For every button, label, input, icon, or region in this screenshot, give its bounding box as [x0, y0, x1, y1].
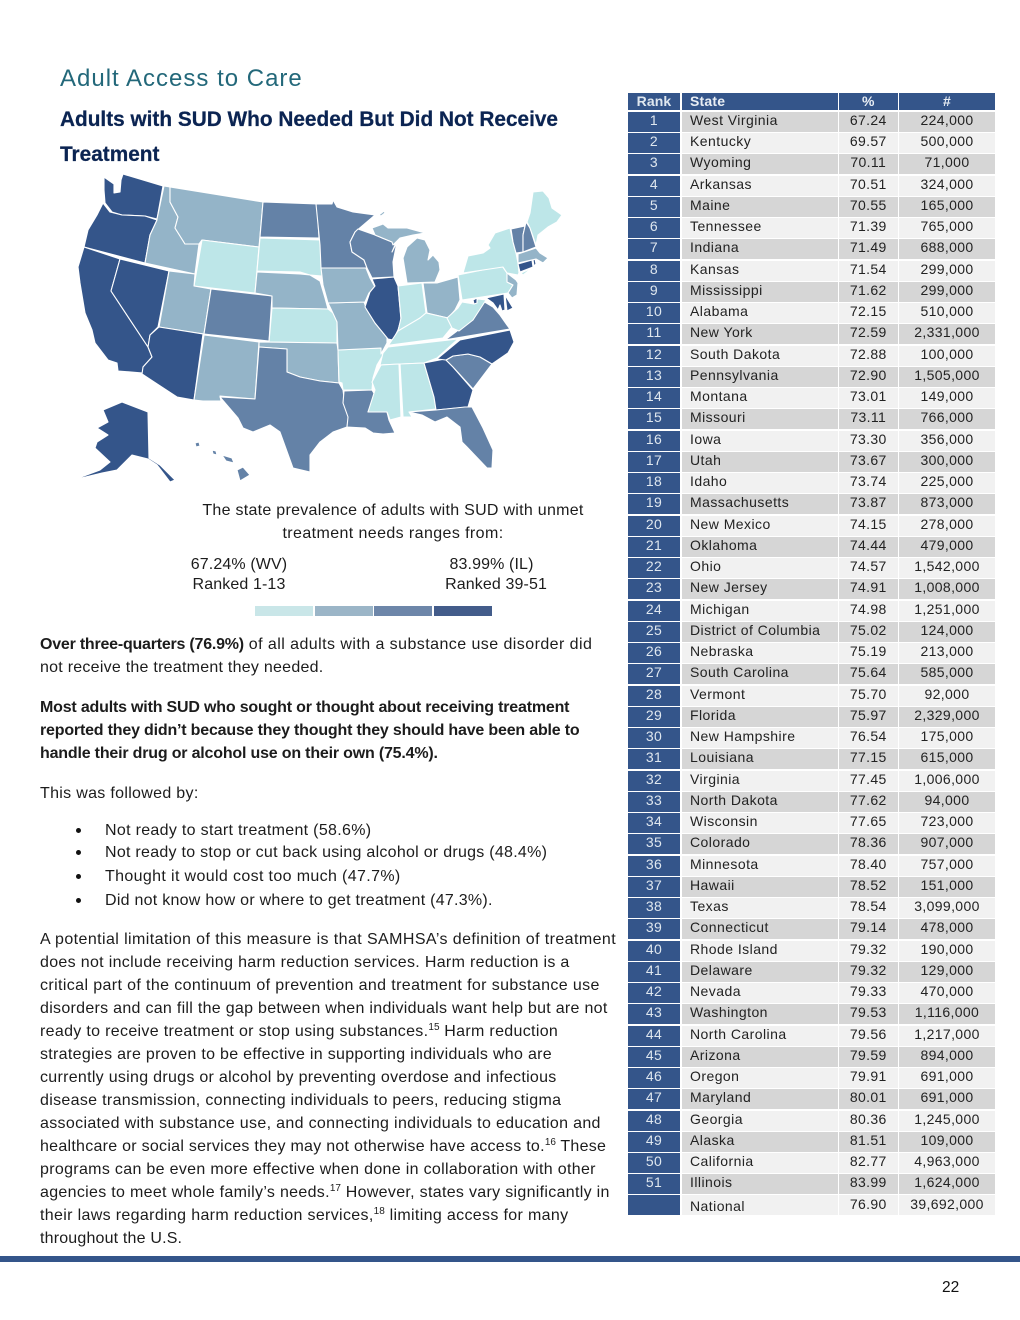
table: state rankings: Montana — [690, 388, 748, 404]
table: state rankings: 38 — [646, 898, 662, 914]
range caption — [202, 502, 584, 542]
table: state rankings: 4,963,000 — [914, 1153, 980, 1169]
table: state rankings: 2 — [650, 133, 658, 149]
range caption: The state prevalence of adults with SUD with unmet — [202, 502, 584, 519]
table: state rankings: 37 — [646, 877, 662, 893]
table: state rankings: 13 — [646, 367, 662, 383]
table: state rankings: 77.62 — [850, 792, 887, 808]
table: state rankings: 16 — [646, 431, 662, 447]
table: state rankings: 77.65 — [850, 813, 887, 829]
table: state rankings: 585,000 — [920, 664, 974, 680]
table: state rankings: 109,000 — [920, 1132, 974, 1148]
table: state rankings: 81.51 — [850, 1132, 887, 1148]
table: state rankings: 765,000 — [920, 218, 974, 234]
table: state rankings: 18 — [646, 473, 662, 489]
table: state rankings: New York — [690, 324, 753, 340]
table: state rankings: New Mexico — [690, 516, 771, 532]
table: state rankings: Oklahoma — [690, 537, 757, 553]
text: limitation paragraph: disorders and can fill the gap between when individuals want help but are not — [40, 1000, 608, 1017]
table: state rankings: Pennsylvania — [690, 367, 779, 383]
table: state rankings: 14 — [646, 388, 662, 404]
text: limitation paragraph: throughout the U.S. — [40, 1230, 182, 1247]
table: state rankings: Alaska — [690, 1132, 735, 1148]
table: state rankings: New Jersey — [690, 579, 768, 595]
table: state rankings: 500,000 — [920, 133, 974, 149]
text: limitation paragraph: agencies to meet whole family’s needs.17 However, states vary significantly in — [40, 1183, 610, 1201]
text: three-quarters finding: not receive the treatment they needed. — [40, 659, 323, 676]
text: limitation paragraph: associated with substance use, and connecting individuals to education and — [40, 1115, 601, 1132]
table: state rankings: 470,000 — [920, 983, 974, 999]
table: state rankings: Florida — [690, 707, 736, 723]
table: state rankings: Texas — [690, 898, 729, 914]
bullet list: Did not know how or where to get treatment (47.3%). — [105, 892, 493, 909]
table: state rankings: 74.44 — [850, 537, 887, 553]
national row: 76.90 — [850, 1196, 887, 1212]
table: state rankings: 75.19 — [850, 643, 887, 659]
table: state rankings: Oregon — [690, 1068, 739, 1084]
table: state rankings: 224,000 — [920, 112, 974, 128]
text: limitation paragraph: their laws regarding harm reduction services,18 limiting access for many — [40, 1206, 568, 1224]
table: state rankings: Connecticut — [690, 919, 769, 935]
table: state rankings: Idaho — [690, 473, 727, 489]
table: state rankings: 82.77 — [850, 1153, 887, 1169]
table: state rankings: 49 — [646, 1132, 662, 1148]
table: state rankings: 1,116,000 — [915, 1004, 979, 1020]
table: state rankings: 71.62 — [850, 282, 887, 298]
table: state rankings: California — [690, 1153, 754, 1169]
high range label: 83.99% (IL) — [449, 556, 534, 573]
table: state rankings: 3,099,000 — [914, 898, 980, 914]
table: state rankings: 74.98 — [850, 601, 887, 617]
text: limitation paragraph: does not include receiving harm reduction services. Harm reduction is a — [40, 954, 570, 971]
table: state rankings: Rhode Island — [690, 941, 778, 957]
national row: National — [690, 1198, 745, 1214]
table: state rankings: 79.32 — [850, 962, 887, 978]
table: state rankings: 873,000 — [920, 494, 974, 510]
table: state rankings: 2,331,000 — [914, 324, 980, 340]
table: state rankings: Missouri — [690, 409, 746, 425]
bullet list: Not ready to stop or cut back using alcohol or drugs (48.4%) — [105, 844, 547, 861]
table: state rankings: 71.49 — [850, 239, 887, 255]
table: state rankings: 70.51 — [850, 176, 887, 192]
table: state rankings: 80.36 — [850, 1111, 887, 1127]
table: state rankings: 74.91 — [850, 579, 887, 595]
table: state rankings: 50 — [646, 1153, 662, 1169]
table: state rankings: 39 — [646, 919, 662, 935]
high range label: Ranked 39-51 — [445, 576, 547, 593]
table: state rankings: 46 — [646, 1068, 662, 1084]
table: state rankings: Wyoming — [690, 154, 751, 170]
table: state rankings: 75.02 — [850, 622, 887, 638]
table: state rankings: 79.32 — [850, 941, 887, 957]
table: state rankings: Alabama — [690, 303, 748, 319]
table: state rankings: 75.64 — [850, 664, 887, 680]
table: state rankings: 42 — [646, 983, 662, 999]
table: state rankings: 72.88 — [850, 346, 887, 362]
table: state rankings: 79.59 — [850, 1047, 887, 1063]
table: state rankings: 36 — [646, 856, 662, 872]
bullet list: Not ready to start treatment (58.6%) — [105, 822, 371, 839]
table: state rankings: North Carolina — [690, 1026, 787, 1042]
table: state rankings: 31 — [646, 749, 662, 765]
text: main reason finding: reported they didn’t because they thought they should have been able to — [40, 722, 579, 739]
table: state rankings: Michigan — [690, 601, 750, 617]
table header: % — [862, 93, 875, 109]
table: state rankings: Minnesota — [690, 856, 759, 872]
table: state rankings: 12 — [646, 346, 662, 362]
bullet list: Thought it would cost too much (47.7%) — [105, 868, 401, 885]
table: state rankings: 165,000 — [920, 197, 974, 213]
table: state rankings: 74.57 — [850, 558, 887, 574]
footer bar — [0, 1256, 1020, 1262]
table: state rankings: 175,000 — [920, 728, 974, 744]
text: limitation paragraph: A potential limitation of this measure is that SAMHSA’s definition of treatment — [40, 931, 616, 948]
table: state rankings: 2,329,000 — [914, 707, 980, 723]
table: state rankings: Ohio — [690, 558, 721, 574]
table: state rankings: Arkansas — [690, 176, 752, 192]
table: state rankings: 324,000 — [920, 176, 974, 192]
text: main reason finding — [40, 699, 579, 762]
table: state rankings: 73.01 — [850, 388, 887, 404]
table: state rankings: Colorado — [690, 834, 750, 850]
table: state rankings: 71,000 — [925, 154, 969, 170]
table: state rankings: South Dakota — [690, 346, 780, 362]
table: state rankings: Illinois — [690, 1174, 733, 1190]
table: state rankings: 75.70 — [850, 686, 887, 702]
table: state rankings: 478,000 — [920, 919, 974, 935]
legend: colour scale — [255, 606, 492, 616]
text: three-quarters finding — [40, 636, 592, 676]
text: limitation paragraph: strategies are proven to be effective in supporting individuals who are — [40, 1046, 552, 1063]
table header — [628, 93, 995, 110]
table: state rankings: 3 — [650, 154, 658, 170]
table: state rankings: 124,000 — [920, 622, 974, 638]
low range label: Ranked 1-13 — [193, 576, 285, 593]
table: state rankings: 71.39 — [850, 218, 887, 234]
table: state rankings: 1,245,000 — [914, 1111, 980, 1127]
table: state rankings: 1,251,000 — [914, 601, 980, 617]
table: state rankings: 1,217,000 — [914, 1026, 980, 1042]
low range label — [191, 556, 287, 593]
table: state rankings: 73.74 — [850, 473, 887, 489]
text: main reason finding: Most adults with SUD who sought or thought about receiving treatment — [40, 699, 569, 716]
table: state rankings: Maryland — [690, 1089, 751, 1105]
table: state rankings: Nevada — [690, 983, 741, 999]
table: state rankings: 1,008,000 — [914, 579, 980, 595]
heading: Treatment — [60, 143, 159, 166]
table: state rankings: 92,000 — [925, 686, 969, 702]
table: state rankings: 24 — [646, 601, 662, 617]
table: state rankings: 6 — [650, 218, 658, 234]
table: state rankings: 21 — [646, 537, 662, 553]
table: state rankings: 79.53 — [850, 1004, 887, 1020]
table: state rankings: 67.24 — [850, 112, 887, 128]
table: state rankings: 78.36 — [850, 834, 887, 850]
text: limitation paragraph: critical part of the continuum of prevention and treatment for substance use — [40, 977, 600, 994]
table: state rankings: 907,000 — [920, 834, 974, 850]
table: state rankings: 766,000 — [920, 409, 974, 425]
table: state rankings: 79.56 — [850, 1026, 887, 1042]
table: state rankings: 1 — [650, 112, 658, 128]
table: state rankings: 1,006,000 — [914, 771, 980, 787]
table: state rankings: 83.99 — [850, 1174, 887, 1190]
national row: 39,692,000 — [910, 1196, 984, 1212]
table: state rankings: 73.30 — [850, 431, 887, 447]
national row — [628, 1195, 995, 1215]
table: state rankings: 27 — [646, 664, 662, 680]
table: state rankings: 299,000 — [920, 261, 974, 277]
table header: # — [943, 93, 951, 109]
table: state rankings: 41 — [646, 962, 662, 978]
heading: Adults with SUD Who Needed But Did Not Receive — [60, 108, 558, 131]
high range label — [445, 556, 547, 593]
table: state rankings: 79.33 — [850, 983, 887, 999]
table: state rankings: 11 — [646, 324, 662, 340]
table: state rankings: 691,000 — [920, 1068, 974, 1084]
table: state rankings: 29 — [646, 707, 662, 723]
table: state rankings: 43 — [646, 1004, 662, 1020]
table: state rankings: 33 — [646, 792, 662, 808]
page number: 22 — [942, 1279, 959, 1296]
table: state rankings: 78.54 — [850, 898, 887, 914]
text: limitation paragraph: disease transmission, connecting individuals to peers, reducing stigma — [40, 1092, 561, 1109]
table: state rankings: District of Columbia — [690, 622, 820, 638]
table: state rankings: 32 — [646, 771, 662, 787]
table: state rankings: 35 — [646, 834, 662, 850]
table: state rankings: South Carolina — [690, 664, 789, 680]
table: state rankings: 44 — [646, 1026, 662, 1042]
table: state rankings: Indiana — [690, 239, 739, 255]
table: state rankings: 615,000 — [920, 749, 974, 765]
table: state rankings: 72.90 — [850, 367, 887, 383]
table: state rankings: 78.52 — [850, 877, 887, 893]
table: state rankings: 20 — [646, 516, 662, 532]
table: state rankings: 225,000 — [920, 473, 974, 489]
table: state rankings: 19 — [646, 494, 662, 510]
table: state rankings: 73.11 — [850, 409, 886, 425]
table: state rankings: 356,000 — [920, 431, 974, 447]
table: state rankings: 1,505,000 — [914, 367, 980, 383]
table: state rankings: North Dakota — [690, 792, 778, 808]
table: state rankings: 100,000 — [920, 346, 974, 362]
table: state rankings: 80.01 — [850, 1089, 887, 1105]
table: state rankings: 77.15 — [850, 749, 887, 765]
table: state rankings: 94,000 — [925, 792, 969, 808]
table: state rankings — [628, 93, 995, 1215]
table: state rankings: Nebraska — [690, 643, 754, 659]
table: state rankings: Vermont — [690, 686, 745, 702]
table: state rankings: 78.40 — [850, 856, 887, 872]
table: state rankings: 73.87 — [850, 494, 887, 510]
text: limitation paragraph — [40, 931, 616, 1247]
text: limitation paragraph: ready to receive treatment or stop using substances.15 Harm reduction — [40, 1022, 558, 1040]
table: state rankings: 40 — [646, 941, 662, 957]
table: state rankings: 10 — [646, 303, 662, 319]
table: state rankings: 510,000 — [920, 303, 974, 319]
table: state rankings: 479,000 — [920, 537, 974, 553]
table: state rankings: Utah — [690, 452, 721, 468]
text: limitation paragraph: healthcare or social services they may not otherwise have access to.16 These — [40, 1137, 606, 1155]
map: US states by unmet treatment need — [78, 174, 562, 482]
table: state rankings: Iowa — [690, 431, 721, 447]
table: state rankings: Washington — [690, 1004, 768, 1020]
table: state rankings: 1,542,000 — [914, 558, 980, 574]
heading — [60, 108, 558, 166]
table: state rankings: 76.54 — [850, 728, 887, 744]
title: Adult Access to Care — [60, 65, 303, 92]
table: state rankings: Kentucky — [690, 133, 751, 149]
table: state rankings: 9 — [650, 282, 658, 298]
table: state rankings: 70.55 — [850, 197, 887, 213]
table: state rankings: West Virginia — [690, 112, 778, 128]
table: state rankings: 17 — [646, 452, 662, 468]
table: state rankings: 77.45 — [850, 771, 887, 787]
text: main reason finding: handle their drug or alcohol use on their own (75.4%). — [40, 745, 438, 762]
table: state rankings: 70.11 — [850, 154, 886, 170]
table: state rankings: 79.91 — [850, 1068, 887, 1084]
table: state rankings: 278,000 — [920, 516, 974, 532]
table header: Rank — [637, 93, 671, 109]
table: state rankings: 79.14 — [850, 919, 887, 935]
table: state rankings: 48 — [646, 1111, 662, 1127]
table: state rankings: 73.67 — [850, 452, 887, 468]
table: state rankings: New Hampshire — [690, 728, 795, 744]
table: state rankings: Virginia — [690, 771, 740, 787]
table: state rankings: Arizona — [690, 1047, 741, 1063]
table: state rankings: 47 — [646, 1089, 662, 1105]
table: state rankings: 71.54 — [850, 261, 887, 277]
table: state rankings: 7 — [650, 239, 658, 255]
table: state rankings: 25 — [646, 622, 662, 638]
table: state rankings: Delaware — [690, 962, 753, 978]
table: state rankings: 28 — [646, 686, 662, 702]
table: state rankings: Kansas — [690, 261, 739, 277]
text: limitation paragraph: currently using drugs or alcohol by preventing overdose and infectious — [40, 1069, 557, 1086]
table: state rankings: 72.59 — [850, 324, 887, 340]
range caption: treatment needs ranges from: — [282, 525, 504, 542]
table: state rankings: 688,000 — [920, 239, 974, 255]
table: state rankings: 757,000 — [920, 856, 974, 872]
table: state rankings: Maine — [690, 197, 730, 213]
table: state rankings: 30 — [646, 728, 662, 744]
table: state rankings: 4 — [650, 176, 658, 192]
table: state rankings: 129,000 — [920, 962, 974, 978]
table: state rankings: 74.15 — [850, 516, 887, 532]
table: state rankings: 190,000 — [920, 941, 974, 957]
table: state rankings: 5 — [650, 197, 658, 213]
table: state rankings: 151,000 — [920, 877, 974, 893]
table: state rankings: 22 — [646, 558, 662, 574]
table: state rankings: 1,624,000 — [914, 1174, 980, 1190]
table: state rankings: 213,000 — [920, 643, 974, 659]
text: limitation paragraph: programs can be even more effective when done in collaboration with other — [40, 1161, 596, 1178]
table: state rankings: 8 — [650, 261, 658, 277]
table: state rankings: 72.15 — [850, 303, 887, 319]
table: state rankings: Georgia — [690, 1111, 743, 1127]
table: state rankings: 75.97 — [850, 707, 887, 723]
table: state rankings: 691,000 — [920, 1089, 974, 1105]
table: state rankings: Tennessee — [690, 218, 762, 234]
table: state rankings: Wisconsin — [690, 813, 758, 829]
table: state rankings: 23 — [646, 579, 662, 595]
table: state rankings: 45 — [646, 1047, 662, 1063]
table: state rankings: 69.57 — [850, 133, 887, 149]
table: state rankings: Hawaii — [690, 877, 735, 893]
table header: State — [690, 93, 725, 109]
bullet list — [76, 822, 547, 909]
table: state rankings: 894,000 — [920, 1047, 974, 1063]
table: state rankings: 15 — [646, 409, 662, 425]
table: state rankings: 723,000 — [920, 813, 974, 829]
table: state rankings: 300,000 — [920, 452, 974, 468]
table: state rankings: Louisiana — [690, 749, 754, 765]
low range label: 67.24% (WV) — [191, 556, 287, 573]
table: state rankings: Mississippi — [690, 282, 763, 298]
table: state rankings: 26 — [646, 643, 662, 659]
table: state rankings: 51 — [646, 1174, 662, 1190]
table: state rankings: 299,000 — [920, 282, 974, 298]
text: followed by: This was followed by: — [40, 785, 199, 802]
table: state rankings: 34 — [646, 813, 662, 829]
table: state rankings: 149,000 — [920, 388, 974, 404]
table: state rankings: Massachusetts — [690, 494, 789, 510]
text: three-quarters finding: Over three-quarters (76.9%) of all adults with a substance use disorder did — [40, 636, 592, 653]
